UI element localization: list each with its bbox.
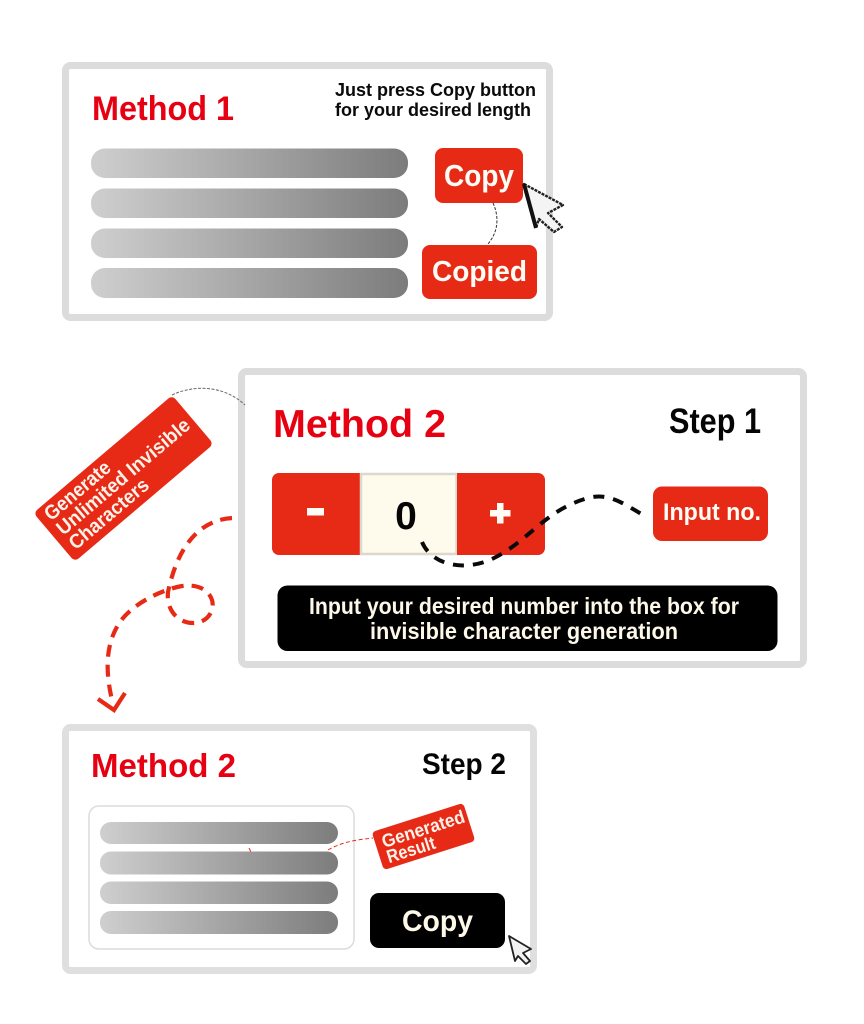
button: copy: Copy [444,158,515,193]
button: copied: Copied [432,256,527,288]
icon: cursor [524,184,563,232]
button: copy [370,893,505,948]
tag: generate unlimited invisible characters: Generate [40,457,115,525]
tag: generate unlimited invisible characters [33,395,214,562]
tag: generated result: Result [384,832,438,867]
stepper value: 0 [395,495,417,538]
icon: cursor [509,936,531,964]
tag: generate unlimited invisible characters: Unlimited Invisible [52,414,195,540]
number stepper [272,473,545,555]
placeholder bars [91,148,408,298]
instruction text: Just press Copy button [335,79,536,100]
heading: method 2: Method 2 [91,747,236,784]
button: copied [422,245,537,299]
heading: step 1: Step 1 [669,402,761,441]
stepper value [361,474,456,554]
stepper plus [457,473,545,555]
red dashed arrow [98,518,232,710]
button: input no. [653,486,768,541]
thin dashed connector: tag to panel [172,388,245,405]
panel: method 2 step 1 [242,372,804,664]
heading: method 1: Method 1 [92,90,234,128]
instruction box: invisible character generation [370,618,678,644]
heading: step 2: Step 2 [422,748,506,781]
tag: generate unlimited invisible characters: Characters [65,474,154,554]
tag: generated result: Generated [379,806,467,852]
button: input no.: Input no. [663,499,761,526]
connector: copy to copied [487,203,497,245]
heading: method 2: Method 2 [273,403,446,446]
button: copy [435,148,523,203]
dashed connector: result to tag [249,838,373,852]
button: copy: Copy [402,905,473,938]
result box [89,806,354,949]
result bars [100,822,338,934]
dashed connector: input to box [422,496,645,565]
instruction text [335,79,536,120]
instruction box [278,586,778,651]
panel: method 2 step 2 [66,728,534,970]
tag: generated result [372,803,475,870]
stepper minus [272,473,360,555]
instruction text: for your desired length [335,99,531,120]
instruction box: Input your desired number into the box for [309,593,739,619]
panel: method 1 [66,66,563,318]
